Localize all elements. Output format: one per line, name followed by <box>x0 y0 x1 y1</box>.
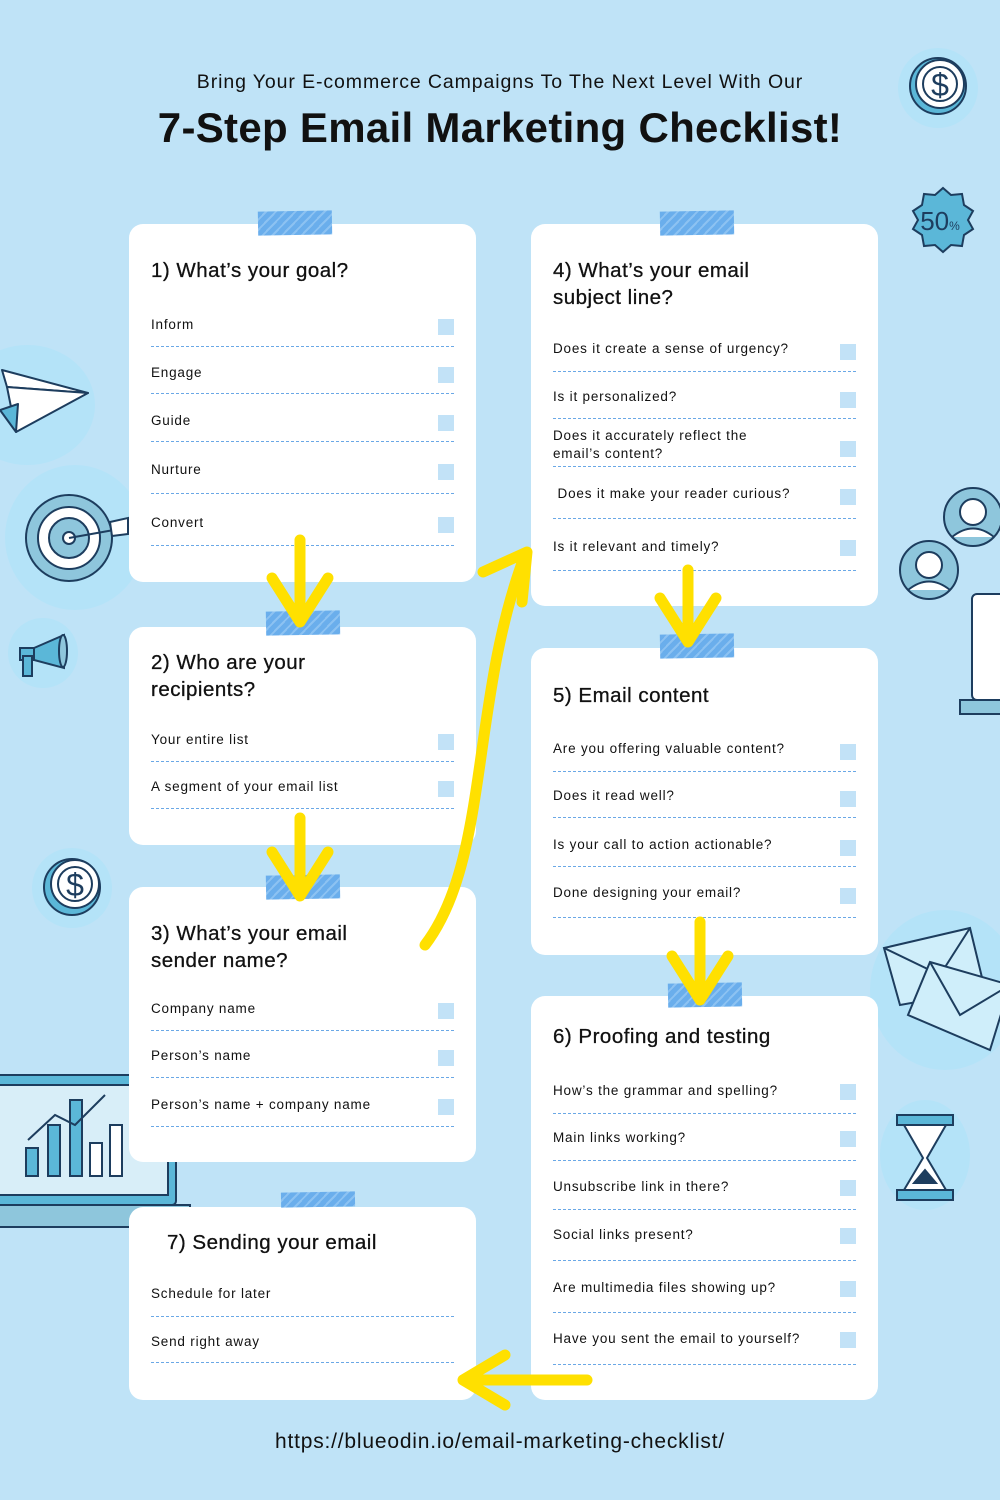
heading 2: 2) Who are your <box>151 651 305 674</box>
heading 1: 1) What’s your goal? <box>151 259 349 282</box>
icon: hourglass <box>897 1115 953 1200</box>
tapes <box>258 210 742 1410</box>
icon: coin left: $ <box>66 867 84 903</box>
panel: step 6: How’s the grammar and spelling? <box>553 1083 778 1098</box>
panel: step 4: email’s content? <box>553 446 663 461</box>
panel: step 4: Does it create a sense of urgency? <box>553 341 789 356</box>
panel: step 5: Are you offering valuable content? <box>553 741 785 756</box>
panel: step 4: Does it make your reader curious? <box>558 486 790 501</box>
panel: step 2: Your entire list <box>151 732 249 747</box>
heading 3: 3) What’s your email <box>151 922 347 945</box>
heading 4: 4) What’s your email <box>553 259 749 282</box>
icon: 50% badge <box>913 188 973 252</box>
icon: envelopes <box>884 928 1000 1050</box>
heading 4: subject line? <box>553 286 673 309</box>
heading 5: 5) Email content <box>553 684 709 707</box>
panel: step 1: Engage <box>151 365 202 380</box>
panel: step 6: Unsubscribe link in there? <box>553 1179 729 1194</box>
arrow: 4 to 5 <box>660 570 716 642</box>
panel: step 6: Social links present? <box>553 1227 694 1242</box>
panel: step 4: Is it personalized? <box>553 389 677 404</box>
panel: step 3: Person’s name <box>151 1048 251 1063</box>
panel: step 7: Send right away <box>151 1334 260 1349</box>
title: 7-Step Email Marketing Checklist! <box>158 104 842 151</box>
panel: step 6: Are multimedia files showing up? <box>553 1280 776 1295</box>
icon: people and laptop <box>900 488 1000 714</box>
panel: step 1 <box>129 224 476 582</box>
panel: step 1: Guide <box>151 413 191 428</box>
header subtitle: Bring Your E-commerce Campaigns To The Next Level With Our <box>197 71 803 93</box>
panel: step 4 <box>531 224 878 606</box>
panel: step 2 <box>129 627 476 845</box>
panel: step 1: Inform <box>151 317 194 332</box>
panel: step 3: Company name <box>151 1001 256 1016</box>
heading 2: recipients? <box>151 678 256 701</box>
icon: 50% badge: 50% <box>920 206 960 236</box>
footer url: https://blueodin.io/email-marketing-checklist/ <box>275 1430 725 1453</box>
panel: step 1: Nurture <box>151 462 202 477</box>
arrow: 2 to 3 <box>272 818 328 896</box>
panel: step 3 <box>129 887 476 1162</box>
panel: step 6 <box>531 996 878 1400</box>
arrow: 3 to 4 curved <box>425 552 527 945</box>
heading 7: 7) Sending your email <box>167 1231 377 1254</box>
panel: step 4: Is it relevant and timely? <box>553 539 719 554</box>
icon: megaphone <box>20 635 67 676</box>
panel: step 6: Main links working? <box>553 1130 686 1145</box>
icon: target <box>26 495 128 581</box>
panel: step 5: Done designing your email? <box>553 885 741 900</box>
panel: step 5 <box>531 648 878 955</box>
panel: step 1: Convert <box>151 515 204 530</box>
heading 2 <box>151 651 305 701</box>
panel: step 3: Person’s name + company name <box>151 1097 371 1112</box>
icon: coin left <box>44 859 100 915</box>
panel: step 2: A segment of your email list <box>151 779 338 794</box>
heading 3: sender name? <box>151 949 288 972</box>
arrow: 6 to 7 <box>463 1355 587 1405</box>
panel: step 6: Have you sent the email to yourself? <box>553 1331 800 1346</box>
icon: laptop chart <box>0 1075 190 1227</box>
icon: coin top <box>910 58 966 114</box>
panel: step 4: Does it accurately reflect the <box>553 428 747 443</box>
panel: step 5: Is your call to action actionable? <box>553 837 772 852</box>
icon: paper plane <box>0 370 88 432</box>
heading 6: 6) Proofing and testing <box>553 1025 771 1048</box>
heading 4 <box>553 259 749 309</box>
icon: coin top: $ <box>931 67 949 103</box>
background bubbles <box>0 48 1000 1210</box>
panel: step 7 <box>129 1207 476 1400</box>
arrow: 5 to 6 <box>672 922 728 1000</box>
heading 3 <box>151 922 347 972</box>
arrow: 1 to 2 <box>272 540 328 622</box>
panel: step 5: Does it read well? <box>553 788 675 803</box>
panel: step 7: Schedule for later <box>151 1286 271 1301</box>
